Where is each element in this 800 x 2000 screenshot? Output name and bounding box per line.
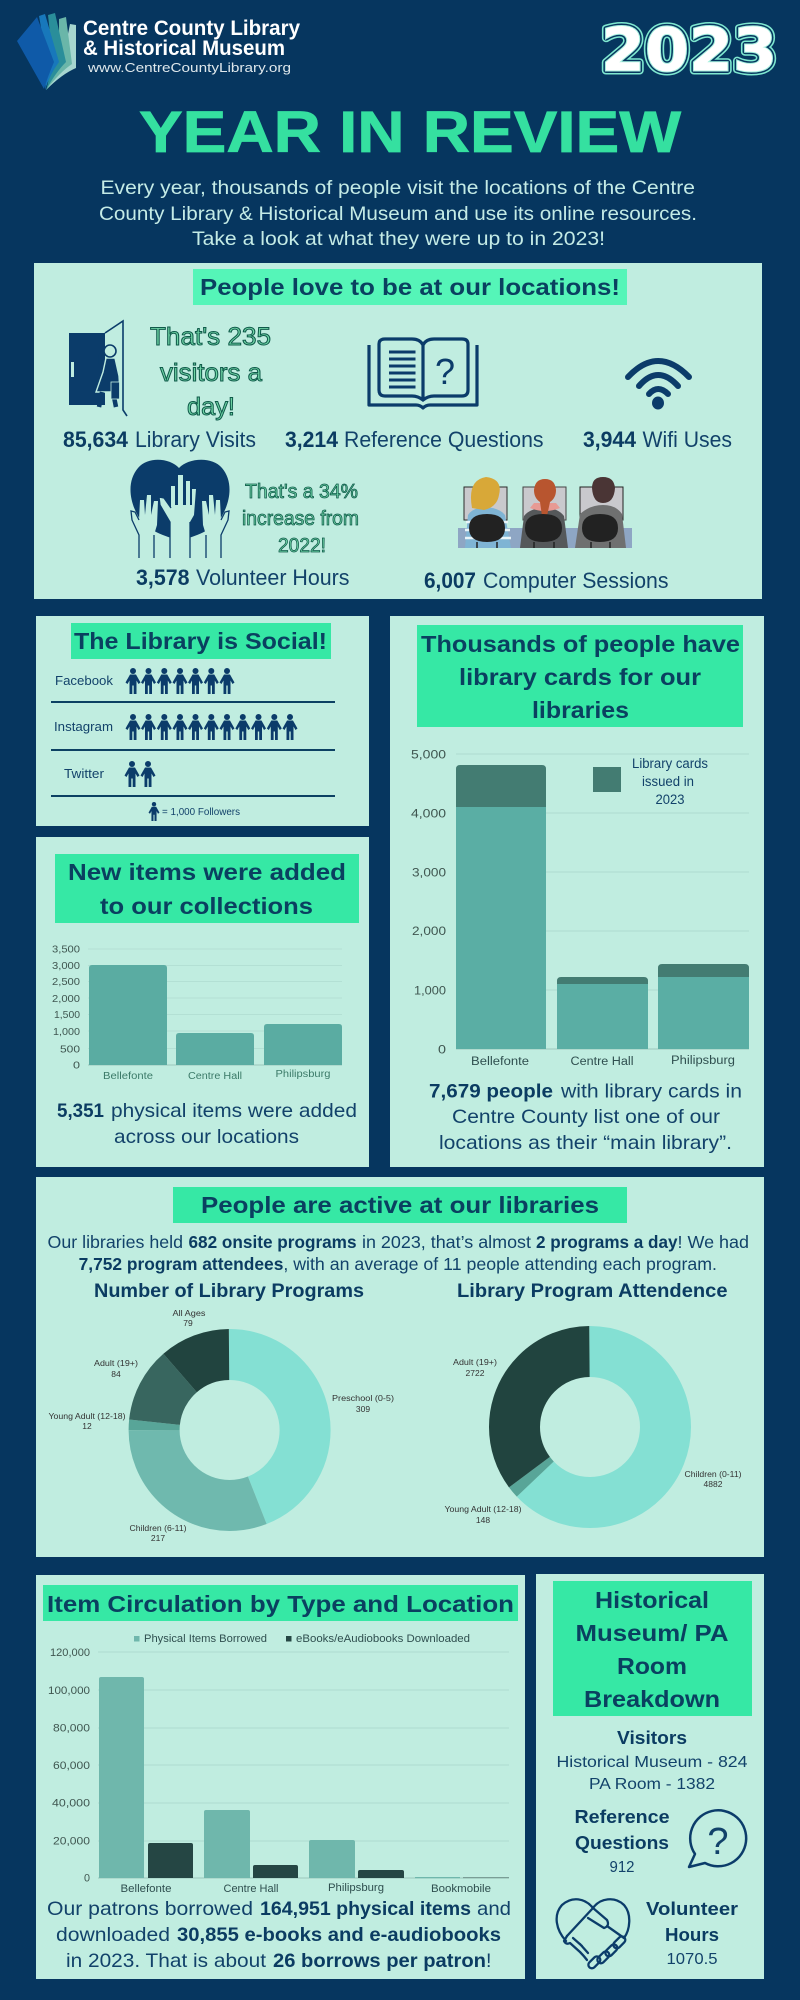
text: program summary: , with an average of 11 people attending each program. <box>283 1254 717 1274</box>
callout: 235 visitors a day <box>150 323 271 421</box>
text: program summary: in 2023, that’s almost <box>362 1232 531 1252</box>
callout: 235 visitors a day: That's 235 <box>150 323 271 351</box>
caption: 7,679 people <box>429 1080 742 1154</box>
legend: circulation chart: Physical Items Borrowed <box>144 1633 267 1645</box>
bar chart: circulation by type and location: 100,000 <box>48 1685 90 1697</box>
caption: 5,351 physical items: physical items were added <box>111 1100 357 1122</box>
caption: 5,351 physical items <box>57 1100 357 1148</box>
donut chart: library program attendance <box>444 1281 742 1525</box>
heading: new items were added <box>55 854 359 923</box>
library name: www.CentreCountyLibrary.org <box>87 60 291 75</box>
caption: total borrows: downloaded <box>56 1924 170 1946</box>
caption: total borrows: 164,951 physical items <box>260 1898 471 1920</box>
icon: library logo book <box>17 13 76 90</box>
text: program summary: 7,752 program attendees <box>79 1254 284 1274</box>
library name: & Historical Museum <box>83 37 285 60</box>
panel: the library is social <box>36 616 369 826</box>
library name <box>83 17 300 75</box>
heading: the library is social: The Library is Social! <box>74 628 327 654</box>
text: program summary: Our libraries held <box>48 1232 183 1252</box>
donut chart: number of library programs: 84 <box>111 1369 121 1379</box>
bar chart: circulation by type and location: Philipsburg <box>328 1882 384 1894</box>
caption: total borrows <box>47 1898 511 1972</box>
year badge 2023: 2023 <box>601 16 777 86</box>
heading: new items were added: New items were added <box>68 859 346 885</box>
bar chart: circulation by type and location: Bellefonte <box>120 1883 172 1895</box>
stat: museum visitors: Historical Museum - 824 <box>556 1754 748 1771</box>
row: Facebook followers: Facebook <box>55 673 114 688</box>
heading: thousands of people have library cards: libraries <box>532 697 629 723</box>
callout: 34 percent increase: increase from <box>242 508 359 530</box>
bar chart: items added by location: 500 <box>60 1044 80 1056</box>
panel: people are active <box>36 1177 764 1557</box>
panel: people love our locations <box>34 263 762 599</box>
bar chart: circulation by type and location: 20,000 <box>53 1836 90 1848</box>
caption: 5,351 physical items: across our locations <box>114 1126 299 1148</box>
stat: library visits <box>63 427 256 452</box>
donut chart: number of library programs: All Ages <box>172 1308 206 1318</box>
panel: historical museum and PA room <box>536 1574 764 1979</box>
row: Facebook followers <box>55 668 234 694</box>
legend: library cards issued in 2023: 2023 <box>656 792 684 807</box>
icon: open book with question mark <box>369 339 477 408</box>
bar chart: items added by location: 1,000 <box>53 1026 80 1038</box>
stat: computer sessions: Computer Sessions <box>483 568 668 593</box>
bar chart: items added by location: 3,000 <box>52 960 80 972</box>
donut chart: library program attendance: 4882 <box>704 1479 723 1489</box>
heading: historical museum / PA room breakdown: Breakdown <box>584 1686 720 1712</box>
bar chart: items added by location <box>52 944 342 1082</box>
icon: hands and heart <box>130 460 230 558</box>
icon: open book with question mark: ? <box>435 351 455 392</box>
stat: computer sessions: 6,007 <box>424 568 476 593</box>
stacked bar chart: library cards by location: Philipsburg <box>671 1055 735 1067</box>
donut chart: library program attendance: 148 <box>476 1515 490 1525</box>
heading: thousands of people have library cards <box>417 625 743 727</box>
stacked bar chart: library cards by location: 5,000 <box>411 748 446 762</box>
caption: 5,351 physical items: 5,351 <box>57 1100 104 1122</box>
bar chart: circulation by type and location: 60,000 <box>53 1760 90 1772</box>
donut chart: library program attendance: Library Program Attendence <box>457 1281 728 1302</box>
text: program summary: ! We had <box>678 1232 749 1252</box>
legend: one person equals 1,000 followers: = 1,000 Followers <box>162 807 240 818</box>
text: program summary <box>48 1232 749 1274</box>
year badge 2023: 2023 <box>601 16 777 86</box>
text: program summary: 2 programs a day <box>536 1232 678 1252</box>
heading: people are active at our libraries: People are active at our libraries <box>201 1192 599 1218</box>
icon: wifi <box>628 361 689 408</box>
bar chart: circulation by type and location: Centre Hall <box>224 1883 278 1895</box>
stat: museum volunteer hours: Hours <box>665 1925 719 1945</box>
stat: volunteer hours: 3,578 <box>136 565 190 590</box>
legend: library cards issued in 2023: Library cards <box>632 756 708 771</box>
legend: library cards issued in 2023: issued in <box>642 774 694 789</box>
image: three people at computers <box>458 477 632 548</box>
row: Twitter followers <box>64 761 156 787</box>
donut chart: number of library programs <box>48 1281 394 1543</box>
caption: 7,679 people: with library cards in <box>560 1080 742 1102</box>
stacked bar chart: library cards by location: 0 <box>438 1042 446 1056</box>
bar chart: items added by location: 3,500 <box>52 944 80 956</box>
intro text <box>99 177 697 250</box>
bar chart: items added by location: 1,500 <box>54 1009 80 1021</box>
panel: item circulation <box>36 1575 525 1979</box>
stat: museum reference questions <box>574 1807 670 1876</box>
stat: museum reference questions: Questions <box>575 1833 669 1853</box>
stat: museum visitors: Visitors <box>617 1728 687 1748</box>
callout: 34 percent increase <box>242 481 359 557</box>
stat: wifi uses: Wifi Uses <box>642 427 732 452</box>
bar chart: items added by location: Philipsburg <box>276 1069 330 1080</box>
bar chart: circulation by type and location: 0 <box>84 1872 90 1884</box>
caption: total borrows: and <box>477 1898 511 1920</box>
donut chart: number of library programs: 79 <box>183 1318 193 1328</box>
stat: museum visitors <box>556 1728 748 1793</box>
stat: reference questions: Reference Questions <box>344 427 544 452</box>
intro text: Every year, thousands of people visit the locations of the Centre <box>100 177 695 199</box>
caption: 7,679 people: 7,679 people <box>429 1080 553 1102</box>
stat: museum visitors: PA Room - 1382 <box>589 1776 715 1793</box>
donut chart: number of library programs: Number of Library Programs <box>94 1281 364 1302</box>
heading: historical museum / PA room breakdown: Museum/ PA <box>576 1620 728 1646</box>
caption: 7,679 people: locations as their “main library”. <box>439 1132 732 1154</box>
callout: 34 percent increase: 2022! <box>278 535 326 557</box>
title: YEAR IN REVIEW <box>139 100 681 165</box>
bar chart: items added by location: Centre Hall <box>188 1071 242 1082</box>
year badge 2023: 2023 <box>601 16 777 86</box>
bar chart: circulation by type and location: 120,000 <box>50 1647 90 1659</box>
donut chart: library program attendance: Adult (19+) <box>453 1357 497 1367</box>
donut chart: number of library programs: Adult (19+) <box>94 1358 138 1368</box>
legend: circulation chart <box>134 1633 470 1645</box>
legend: circulation chart: eBooks/eAudiobooks Downloaded <box>296 1633 470 1645</box>
caption: total borrows: ! <box>486 1950 491 1972</box>
donut chart: library program attendance: 2722 <box>466 1368 485 1378</box>
bar chart: items added by location: Bellefonte <box>103 1071 153 1082</box>
stat: museum reference questions: 912 <box>610 1859 635 1876</box>
bar chart: circulation by type and location: 40,000 <box>52 1798 90 1810</box>
donut chart: number of library programs: 309 <box>356 1404 370 1414</box>
stacked bar chart: library cards by location: 3,000 <box>412 866 446 880</box>
stacked bar chart: library cards by location: 1,000 <box>414 984 446 998</box>
heading: historical museum / PA room breakdown <box>553 1581 752 1716</box>
stat: reference questions: 3,214 <box>285 427 339 452</box>
heading: historical museum / PA room breakdown: Room <box>617 1653 687 1679</box>
bar chart: circulation by type and location: Bookmobile <box>431 1883 491 1895</box>
donut chart: number of library programs: Young Adult (12-18) <box>48 1411 126 1421</box>
row: Instagram followers: Instagram <box>54 719 113 734</box>
heading: item circulation by type and location: Item Circulation by Type and Location <box>47 1591 514 1617</box>
stacked bar chart: library cards by location: 2,000 <box>412 924 446 938</box>
stat: wifi uses <box>583 427 732 452</box>
icon: woman walking through door <box>69 321 127 416</box>
donut chart: number of library programs: 217 <box>151 1533 165 1543</box>
row: Instagram followers <box>54 714 298 740</box>
donut chart: number of library programs: 12 <box>82 1421 92 1431</box>
stat: library visits: Library Visits <box>135 427 256 452</box>
heading: people are active at our libraries <box>173 1187 627 1223</box>
heading: new items were added: to our collections <box>100 893 313 919</box>
donut chart: number of library programs: Children (6-11) <box>130 1523 187 1533</box>
stat: volunteer hours: Volunteer Hours <box>196 565 350 590</box>
bar chart: circulation by type and location <box>48 1647 509 1895</box>
stat: wifi uses: 3,944 <box>583 427 637 452</box>
intro text: Take a look at what they were up to in 2023! <box>192 228 605 250</box>
stat: museum volunteer hours: 1070.5 <box>666 1951 718 1968</box>
stat: museum volunteer hours: Volunteer <box>646 1899 738 1919</box>
bar chart: items added by location: 2,000 <box>52 993 80 1005</box>
bar chart: items added by location: 2,500 <box>52 976 80 988</box>
heading: historical museum / PA room breakdown: Historical <box>595 1587 709 1613</box>
legend: one person equals 1,000 followers <box>149 802 240 821</box>
heading: thousands of people have library cards: library cards for our <box>459 664 701 690</box>
caption: total borrows: Our patrons borrowed <box>47 1898 253 1920</box>
caption: 7,679 people: Centre County list one of our <box>452 1106 721 1128</box>
heading: item circulation by type and location <box>43 1585 518 1621</box>
text: program summary: 682 onsite programs <box>188 1232 357 1252</box>
donut chart: library program attendance: Young Adult (12-18) <box>444 1504 522 1514</box>
callout: 235 visitors a day: visitors a <box>160 359 262 387</box>
icon: speech bubble with question mark: ? <box>707 1821 729 1863</box>
row: Twitter followers: Twitter <box>64 766 105 781</box>
heading: the library is social <box>71 623 331 659</box>
heading: people love to be at our locations: People love to be at our locations! <box>200 274 620 300</box>
panel: new items added <box>36 837 369 1167</box>
stat: library visits: 85,634 <box>63 427 129 452</box>
stacked bar chart: library cards by location: 4,000 <box>411 806 446 820</box>
caption: total borrows: 30,855 e-books and e-audiobooks <box>177 1924 501 1946</box>
callout: 34 percent increase: That's a 34% <box>245 481 358 503</box>
library name: Centre County Library <box>83 17 300 40</box>
icon: speech bubble with question mark <box>689 1810 746 1867</box>
heading: thousands of people have library cards: Thousands of people have <box>421 631 740 657</box>
icon: handshake heart <box>557 1899 629 1970</box>
stacked bar chart: library cards by location: Bellefonte <box>471 1056 529 1068</box>
bar chart: circulation by type and location: 80,000 <box>53 1722 90 1734</box>
stat: museum reference questions: Reference <box>574 1807 670 1827</box>
caption: total borrows: in 2023. That is about <box>66 1950 267 1972</box>
panel: library cards <box>390 616 764 1167</box>
legend: library cards issued in 2023 <box>593 756 708 807</box>
donut chart: number of library programs: Preschool (0-5) <box>332 1393 394 1403</box>
heading: people love to be at our locations <box>193 269 627 305</box>
stacked bar chart: library cards by location <box>411 748 749 1068</box>
caption: total borrows: 26 borrows per patron <box>273 1950 486 1972</box>
intro text: County Library & Historical Museum and use its online resources. <box>99 203 697 225</box>
stat: museum volunteer hours <box>646 1899 738 1968</box>
bar chart: items added by location: 0 <box>73 1060 80 1072</box>
stacked bar chart: library cards by location: Centre Hall <box>570 1056 634 1068</box>
donut chart: library program attendance: Children (0-11) <box>684 1469 742 1479</box>
callout: 235 visitors a day: day! <box>187 393 235 421</box>
